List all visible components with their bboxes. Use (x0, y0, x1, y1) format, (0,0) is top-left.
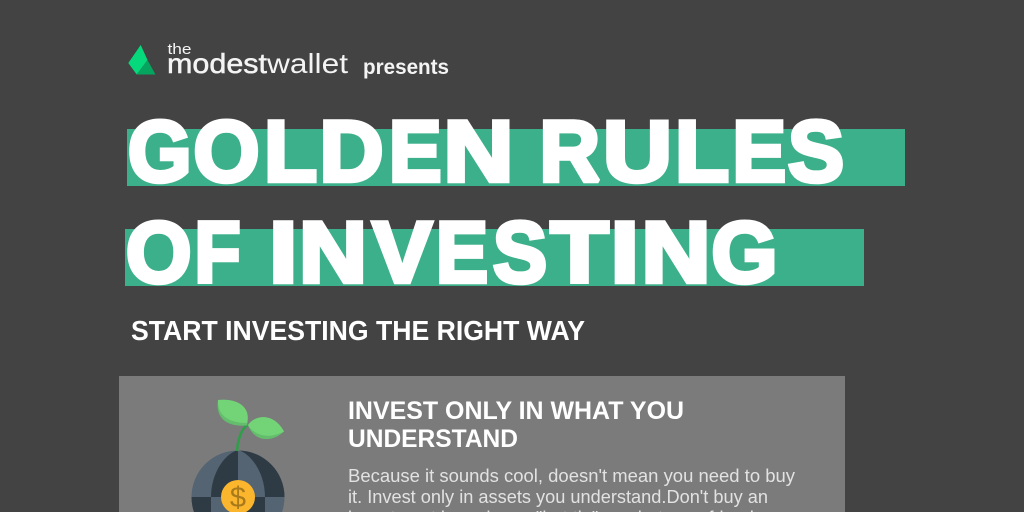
panel heading: INVEST ONLY IN WHAT YOU (348, 397, 684, 425)
panel body text: it. Invest only in assets you understand.Don't buy an (348, 486, 768, 507)
icon: plant growing from globe with dollar coin (190, 400, 286, 512)
icon: logo mark (128, 45, 156, 74)
title line 1: L (264, 104, 317, 200)
left leaf (218, 400, 248, 426)
title line 1: D (320, 104, 384, 200)
panel body text: Because it sounds cool, doesn't mean you need to buy (348, 465, 796, 486)
panel body text (348, 465, 796, 512)
title line 1: S (788, 104, 844, 200)
right leaf (248, 417, 284, 439)
logo wordmark: modest (167, 48, 267, 79)
logo: the modest wallet presents (128, 41, 449, 79)
title line 1: L (675, 104, 729, 200)
title line 2: V (372, 205, 432, 301)
title line 2: T (550, 205, 608, 301)
title line 1: U (603, 104, 672, 200)
title line 2: N (299, 205, 367, 301)
panel: invest only in what you understand (119, 376, 845, 512)
title line 1: G (128, 104, 192, 200)
title line 2: O (126, 205, 192, 301)
title highlight bar 1 (127, 129, 905, 186)
title highlight bar 2 (125, 229, 864, 286)
title line 2: I (269, 205, 298, 301)
panel heading: UNDERSTAND (348, 425, 518, 453)
globe (190, 450, 286, 512)
logo wordmark (167, 41, 348, 79)
coin (221, 480, 255, 512)
title line 1: N (444, 104, 514, 200)
title line 2: G (712, 205, 778, 301)
title line 2: N (642, 205, 710, 301)
title line 2: S (493, 205, 547, 301)
title line 1: O (194, 104, 260, 200)
title line 1: E (389, 104, 442, 200)
title line 2: F (194, 205, 240, 301)
logo wordmark: wallet (266, 48, 348, 79)
title line 2: E (436, 205, 488, 301)
title line 1: E (732, 104, 786, 200)
title line 2: I (610, 205, 639, 301)
panel background (119, 376, 845, 512)
panel heading (348, 397, 684, 453)
title: golden rules of investing (125, 104, 905, 301)
stem (237, 425, 247, 451)
subtitle: START INVESTING THE RIGHT WAY (131, 315, 585, 346)
presents label: presents (363, 56, 449, 79)
logo wordmark: the (168, 41, 192, 58)
title line 1: R (540, 104, 600, 200)
